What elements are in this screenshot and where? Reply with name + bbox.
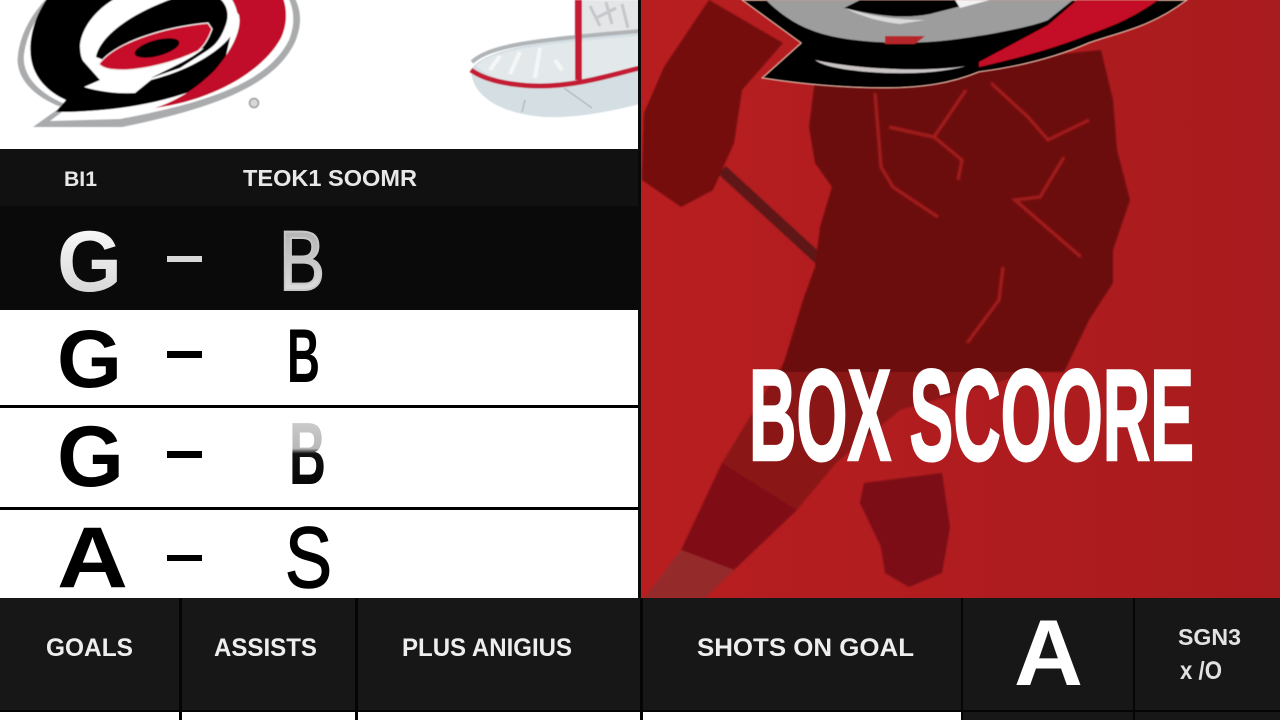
leg: thigh (722, 360, 1040, 510)
panel: team score header (0, 149, 640, 206)
icon: hockey net (471, 0, 640, 117)
player glove (642, 0, 783, 207)
poster logo crop (742, 0, 1187, 88)
row 4 (0, 507, 640, 606)
row 2: G (57, 314, 122, 405)
row 3 (0, 404, 640, 507)
column label: team score: TEOK1 SOOMR (243, 165, 417, 191)
stat label: plus minus: PLUS ANIGIUS (402, 634, 572, 662)
panel: red poster (640, 0, 1280, 598)
row 1: B (279, 214, 325, 308)
row 4: S (285, 510, 332, 606)
stat label: goals: GOALS (46, 634, 133, 662)
row 3: G (57, 409, 124, 505)
player silhouette (642, 0, 1130, 598)
jersey highlights (875, 83, 1089, 343)
row 2: B (287, 314, 320, 399)
stat label: assists: ASSISTS (214, 634, 317, 662)
row 3: B (289, 404, 326, 503)
grade letter: A (1014, 600, 1083, 705)
icon: hurricanes logo (18, 0, 300, 127)
panel: stat bar (0, 598, 1280, 720)
panel: logo header (0, 0, 640, 149)
row 2 (0, 310, 640, 405)
row 4: A (57, 510, 128, 606)
side note (1178, 624, 1241, 685)
side note: SGN3 (1178, 624, 1241, 650)
row 1: G (57, 214, 122, 310)
column label: BI1 (64, 168, 97, 191)
panel: score rows (0, 206, 640, 606)
row 1 (0, 206, 640, 310)
side note: x /O (1180, 657, 1222, 685)
panel divider (638, 0, 641, 598)
stat label: shots on goal: SHOTS ON GOAL (697, 634, 914, 662)
leg: boot (860, 473, 950, 587)
leg: shin and sock (681, 463, 797, 570)
player torso (781, 50, 1130, 372)
hockey stick (722, 170, 820, 260)
